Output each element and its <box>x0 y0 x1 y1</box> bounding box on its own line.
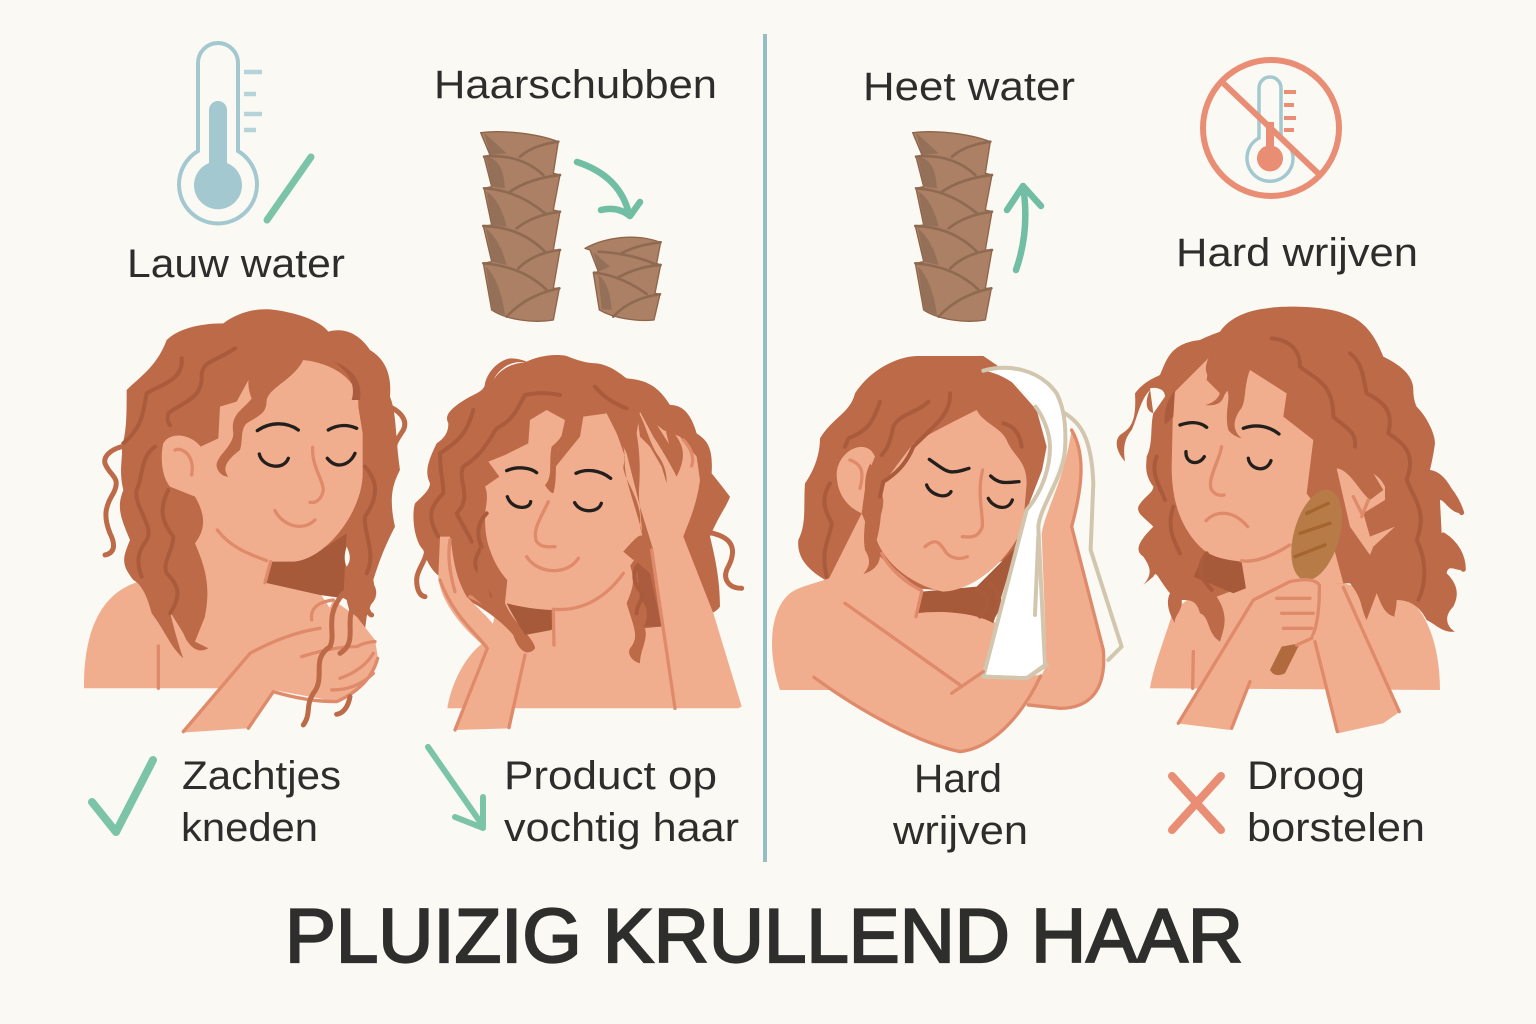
icon: hair cuticle closed <box>481 132 560 321</box>
label: hard wrijven bottom: Hard <box>914 757 1002 801</box>
label: lauw water: Lauw water <box>127 242 345 286</box>
figure: woman kneading curls <box>84 309 405 733</box>
center divider <box>763 34 767 862</box>
label: droog borstelen: Droog <box>1247 754 1365 798</box>
title: PLUIZIG KRULLEND HAAR <box>285 894 1243 979</box>
label: zachtjes kneden: Zachtjes <box>182 754 341 798</box>
label: hard wrijven top: Hard wrijven <box>1176 231 1418 275</box>
label: product op vochtig haar: vochtig haar <box>504 806 739 850</box>
arrow: down <box>428 747 483 828</box>
figure: woman rubbing with towel <box>772 356 1122 752</box>
cross mark <box>1172 776 1221 830</box>
icon: thermometer lukewarm <box>179 43 311 223</box>
label: haarschubben: Haarschubben <box>434 63 717 107</box>
label: zachtjes kneden: kneden <box>181 806 318 850</box>
label: hard wrijven bottom: wrijven <box>892 809 1028 853</box>
arrow: cuticle curve <box>577 162 640 216</box>
check mark <box>92 760 153 832</box>
label: droog borstelen: borstelen <box>1247 806 1425 850</box>
arrow: up <box>1007 186 1041 270</box>
label: product op vochtig haar: Product op <box>504 754 717 798</box>
icon: hair cuticle open <box>913 132 992 321</box>
figure: woman applying product <box>413 355 742 730</box>
figure: woman brushing dry hair <box>1117 307 1463 733</box>
icon: forbidden thermometer <box>1203 60 1339 196</box>
icon: short cuticle <box>585 237 661 320</box>
label: heet water: Heet water <box>863 65 1075 109</box>
